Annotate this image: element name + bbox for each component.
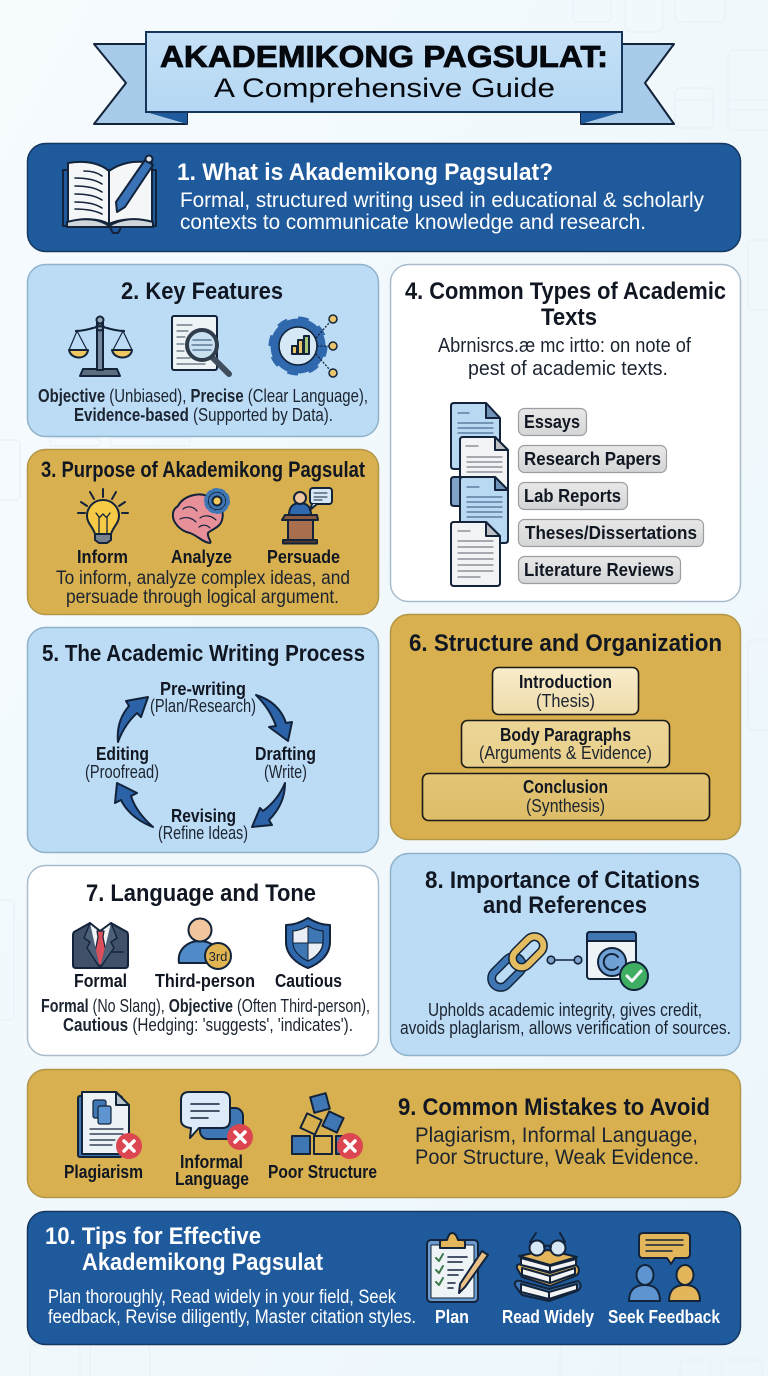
description: Plagiarism, Informal Language, bbox=[415, 1124, 698, 1147]
step: revising: (Refine Ideas) bbox=[158, 823, 248, 843]
icon: shield bbox=[286, 918, 330, 968]
icon labels: Poor Structure bbox=[268, 1162, 377, 1182]
icon: clipboard checklist bbox=[427, 1233, 488, 1302]
description: Abrnisrcs.æ mc irtto: on note of bbox=[438, 335, 691, 357]
icon: balance scale bbox=[69, 316, 132, 376]
list of text types bbox=[518, 408, 704, 584]
description bbox=[400, 1000, 731, 1038]
right ribbon tail bbox=[581, 44, 674, 124]
panel 4: common types of academic texts bbox=[390, 264, 740, 602]
icon labels: Persuade bbox=[267, 547, 340, 567]
description: Formal, structured writing used in educational & scholarly bbox=[180, 189, 704, 212]
item: essays bbox=[518, 408, 586, 436]
description bbox=[415, 1124, 699, 1169]
heading: 8. Importance of Citations bbox=[425, 867, 700, 894]
heading bbox=[45, 1223, 323, 1276]
description: pest of academic texts. bbox=[468, 358, 668, 380]
icon: plagiarism document bbox=[78, 1092, 142, 1159]
icon: books and glasses bbox=[515, 1233, 581, 1301]
block: introduction: (Thesis) bbox=[536, 691, 595, 711]
item: essays: Essays bbox=[524, 412, 580, 432]
step: drafting bbox=[255, 744, 316, 782]
block: body paragraphs: (Arguments & Evidence) bbox=[479, 743, 652, 763]
icon labels: Analyze bbox=[171, 547, 232, 567]
icon labels: Formal bbox=[74, 971, 127, 991]
icon: connector bbox=[547, 956, 582, 964]
description bbox=[180, 189, 704, 234]
step: pre-writing: Pre-writing bbox=[160, 679, 246, 699]
heading bbox=[425, 867, 700, 919]
panel 5: academic writing process bbox=[28, 628, 378, 852]
description: Objective (Unbiased), Precise (Clear Language), bbox=[38, 386, 368, 406]
icon: people with speech bubble bbox=[629, 1233, 700, 1301]
icon: copyright window with check bbox=[587, 932, 648, 990]
step: revising bbox=[158, 806, 248, 843]
icon labels: Third-person bbox=[155, 971, 255, 991]
item: literature reviews: Literature Reviews bbox=[524, 560, 674, 580]
icon: open book and pen bbox=[63, 156, 156, 233]
step: drafting: Drafting bbox=[255, 744, 316, 764]
step: pre-writing: (Plan/Research) bbox=[150, 696, 256, 716]
heading: 6. Structure and Organization bbox=[409, 630, 722, 657]
icon labels: Inform bbox=[77, 547, 128, 567]
icon: brain with gear bbox=[173, 490, 228, 543]
block: body paragraphs bbox=[462, 720, 670, 768]
description: Evidence-based (Supported by Data). bbox=[74, 405, 333, 425]
banner plate bbox=[146, 32, 622, 112]
icon: poor structure blocks bbox=[292, 1093, 363, 1159]
heading: 3. Purpose of Akademikong Pagsulat bbox=[41, 457, 366, 482]
panel 3: purpose bbox=[28, 450, 378, 614]
block: introduction bbox=[492, 668, 638, 714]
description: Upholds academic integrity, gives credit, bbox=[428, 1000, 702, 1020]
heading: 1. What is Akademikong Pagsulat? bbox=[177, 159, 553, 186]
icon: chain links bbox=[488, 933, 547, 991]
description: persuade through logical argument. bbox=[66, 587, 339, 608]
icon labels: Informal bbox=[180, 1152, 243, 1172]
heading: Texts bbox=[541, 304, 597, 331]
icon: stacked documents bbox=[451, 403, 508, 586]
block: conclusion: Conclusion bbox=[523, 777, 608, 797]
description: contexts to communicate knowledge and research. bbox=[180, 211, 646, 234]
step: drafting: (Write) bbox=[264, 762, 307, 782]
panel 9: common mistakes bbox=[28, 1070, 740, 1198]
block: conclusion bbox=[422, 774, 710, 820]
icon: speaker at podium bbox=[282, 488, 332, 544]
panel 8: citations and references bbox=[390, 854, 740, 1056]
left ribbon tail bbox=[94, 44, 187, 124]
icon labels bbox=[64, 1152, 377, 1189]
arrow: revising to editing bbox=[115, 783, 153, 827]
icon: third person: 3rd bbox=[209, 949, 227, 964]
heading: 10. Tips for Effective bbox=[45, 1223, 261, 1250]
title banner bbox=[94, 32, 674, 124]
icon: light bulb bbox=[78, 489, 128, 543]
heading: Akademikong Pagsulat bbox=[82, 1249, 323, 1276]
panel 2: key features bbox=[28, 264, 378, 436]
item: theses and dissertations: Theses/Dissertations bbox=[525, 523, 697, 543]
icon labels bbox=[74, 971, 342, 991]
icon labels: Seek Feedback bbox=[608, 1307, 721, 1327]
icon labels: Read Widely bbox=[502, 1307, 594, 1327]
icon labels: Language bbox=[175, 1169, 249, 1189]
item: lab reports: Lab Reports bbox=[524, 486, 621, 506]
heading: 4. Common Types of Academic bbox=[405, 278, 726, 305]
item: lab reports bbox=[518, 482, 628, 510]
description bbox=[41, 996, 370, 1035]
panel 1: what is akademikong pagsulat bbox=[28, 144, 740, 252]
icon: suit and tie bbox=[73, 923, 128, 968]
arrow: editing to pre-writing bbox=[118, 697, 148, 742]
icon: gear with chart and nodes bbox=[272, 315, 337, 377]
block: body paragraphs: Body Paragraphs bbox=[500, 725, 631, 745]
heading: 7. Language and Tone bbox=[86, 880, 316, 907]
icon labels: Cautious bbox=[275, 971, 342, 991]
icon: third person bbox=[179, 918, 231, 969]
heading: 2. Key Features bbox=[121, 278, 283, 305]
panel 10: tips bbox=[28, 1212, 740, 1344]
description: To inform, analyze complex ideas, and bbox=[56, 568, 350, 589]
description bbox=[438, 335, 691, 380]
icon: document and magnifier bbox=[172, 316, 229, 374]
description bbox=[48, 1287, 416, 1328]
heading: 9. Common Mistakes to Avoid bbox=[398, 1094, 710, 1121]
heading bbox=[405, 278, 726, 331]
description: Poor Structure, Weak Evidence. bbox=[415, 1146, 699, 1169]
step: pre-writing bbox=[150, 679, 256, 716]
description: Plan thoroughly, Read widely in your field, Seek bbox=[48, 1287, 396, 1308]
description bbox=[38, 386, 368, 425]
icon labels: Plagiarism bbox=[64, 1162, 143, 1182]
description bbox=[56, 568, 350, 608]
arrow: drafting to revising bbox=[252, 783, 285, 827]
step: editing: Editing bbox=[96, 744, 149, 764]
main title: AKADEMIKONG PAGSULAT: bbox=[160, 39, 608, 74]
block: conclusion: (Synthesis) bbox=[526, 796, 605, 816]
description: Formal (No Slang), Objective (Often Third-person), bbox=[41, 996, 370, 1016]
block: introduction: Introduction bbox=[519, 672, 612, 692]
step: revising: Revising bbox=[171, 806, 236, 826]
step: editing bbox=[85, 744, 159, 782]
arrow: pre-writing to drafting bbox=[256, 695, 292, 741]
description: Cautious (Hedging: 'suggests', 'indicates'). bbox=[63, 1015, 353, 1035]
icon labels bbox=[77, 547, 340, 567]
heading: and References bbox=[483, 892, 647, 919]
subtitle: A Comprehensive Guide bbox=[214, 73, 555, 103]
description: feedback, Revise diligently, Master citation styles. bbox=[48, 1307, 416, 1328]
icon: informal speech bubbles bbox=[181, 1092, 253, 1150]
heading: 5. The Academic Writing Process bbox=[42, 640, 365, 666]
icon labels bbox=[435, 1307, 721, 1327]
item: research papers: Research Papers bbox=[524, 449, 661, 469]
step: editing: (Proofread) bbox=[85, 762, 159, 782]
icon labels: Plan bbox=[435, 1307, 469, 1327]
panel 7: language and tone bbox=[28, 866, 378, 1056]
panel 6: structure and organization bbox=[390, 614, 740, 840]
